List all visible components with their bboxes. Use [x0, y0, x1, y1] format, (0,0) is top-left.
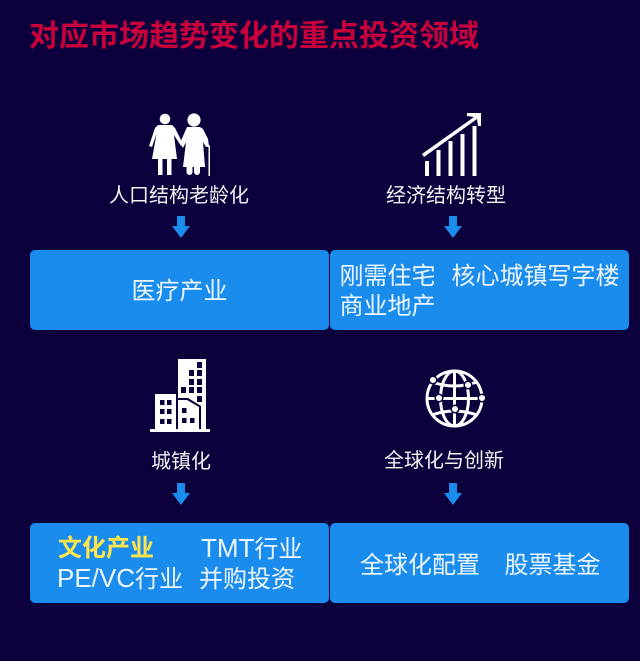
panel: real estate — [330, 250, 629, 330]
icon: globe — [426, 370, 485, 428]
arrow — [444, 483, 462, 505]
label: economic transformation: 经济结构转型 — [386, 185, 506, 207]
icon: elderly couple — [149, 113, 210, 176]
text: PE/VC: PE/VC行业 — [57, 563, 183, 593]
panel text: 医疗产业 — [132, 278, 228, 305]
text: equity funds: 股票基金 — [504, 552, 600, 579]
title: 对应市场趋势变化的重点投资领域 — [29, 20, 479, 53]
panel: global allocation — [330, 523, 629, 603]
panel text: 核心城镇写字楼 — [452, 263, 620, 290]
label: urbanisation: 城镇化 — [151, 451, 211, 473]
panel text: 刚需住宅 — [340, 263, 436, 290]
panel text — [340, 263, 620, 320]
label: population ageing: 人口结构老龄化 — [109, 185, 249, 207]
label: globalisation and innovation: 全球化与创新 — [384, 450, 504, 472]
text: M&amp;A: 并购投资 — [199, 566, 295, 593]
text: global allocation: 全球化配置 — [360, 552, 480, 579]
icon: city buildings — [150, 359, 210, 432]
panel: healthcare — [30, 250, 329, 330]
arrow — [444, 216, 462, 238]
icon: growth chart — [422, 113, 481, 176]
arrow — [172, 483, 190, 505]
panel: culture and TMT — [30, 523, 329, 603]
text: TMT: TMT行业 — [201, 533, 302, 563]
highlighted text: 文化产业 — [58, 535, 154, 562]
arrow — [172, 216, 190, 238]
panel text: 商业地产 — [340, 293, 436, 320]
